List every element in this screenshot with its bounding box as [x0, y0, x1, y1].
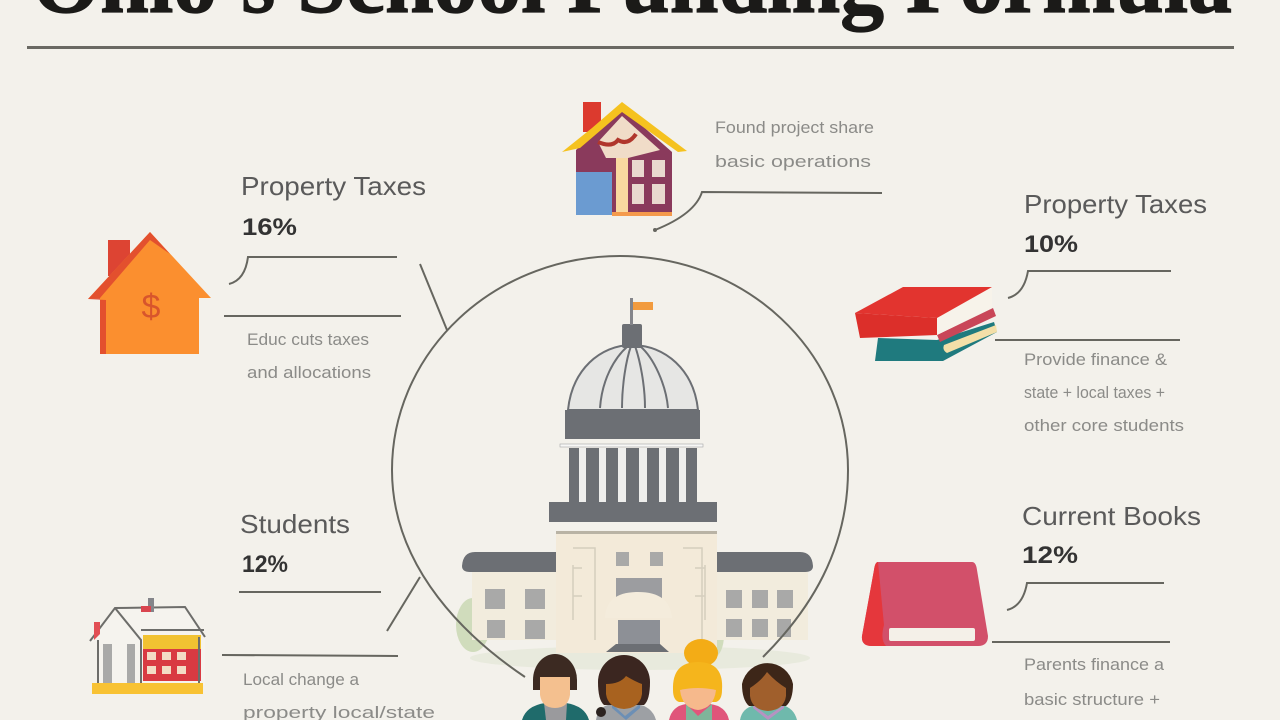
callout: property taxes right: 10%: [1024, 231, 1078, 258]
callout: top centre: [653, 118, 882, 232]
callout: students: Students: [240, 509, 350, 539]
callout: property taxes left: 16%: [242, 214, 297, 241]
icon: orange house with dollar sign: $: [142, 288, 161, 326]
connector: left callout to circle: [420, 264, 447, 330]
callout: property taxes right: [995, 189, 1207, 435]
dome base: [549, 502, 717, 522]
callout: students: [222, 509, 435, 720]
student 3: [669, 639, 729, 720]
callout: students: 12%: [242, 551, 288, 578]
windows: [485, 589, 793, 639]
student 1: [522, 654, 589, 720]
callout: property taxes left: Property Taxes: [241, 171, 426, 201]
callout: current books: Parents finance a: [1024, 655, 1165, 674]
callout: current books: 12%: [1022, 542, 1078, 569]
callout: property taxes right: Property Taxes: [1024, 189, 1207, 219]
trees: [456, 598, 724, 657]
icon: orange house with dollar sign: [88, 232, 211, 354]
icon: stacked books: [855, 287, 997, 361]
callout: property taxes right: Provide finance &: [1024, 350, 1168, 369]
capitol building: [456, 298, 813, 670]
student 4: [740, 663, 797, 720]
title: [27, 0, 1234, 49]
callout: property taxes left: [224, 171, 426, 382]
wings: [472, 572, 558, 640]
icon: top house: [562, 102, 687, 216]
callout: current books: Current Books: [1022, 501, 1201, 531]
ground: [470, 646, 810, 670]
flag: [630, 298, 633, 325]
callout: property taxes right: state + local taxes +: [1024, 383, 1165, 402]
columns: [569, 448, 697, 502]
callout: property taxes right: other core students: [1024, 416, 1184, 435]
connector: students callout to circle: [387, 577, 420, 631]
callout: current books: [992, 501, 1201, 709]
callout: current books: basic structure +: [1024, 690, 1160, 709]
callout: property taxes left: and allocations: [247, 363, 371, 382]
dome: [568, 345, 698, 410]
central block: [556, 531, 717, 653]
callout: property taxes left: Educ cuts taxes: [247, 330, 369, 349]
callout: students: Local change a: [243, 670, 360, 689]
central circle outline: [392, 256, 848, 677]
icon: small school house: [90, 598, 205, 694]
icon: pink book: [862, 562, 988, 646]
callout: top centre: basic operations: [715, 152, 871, 171]
students group: [522, 639, 797, 720]
student 2: [596, 655, 656, 720]
callout: top centre: Found project share: [715, 118, 874, 137]
